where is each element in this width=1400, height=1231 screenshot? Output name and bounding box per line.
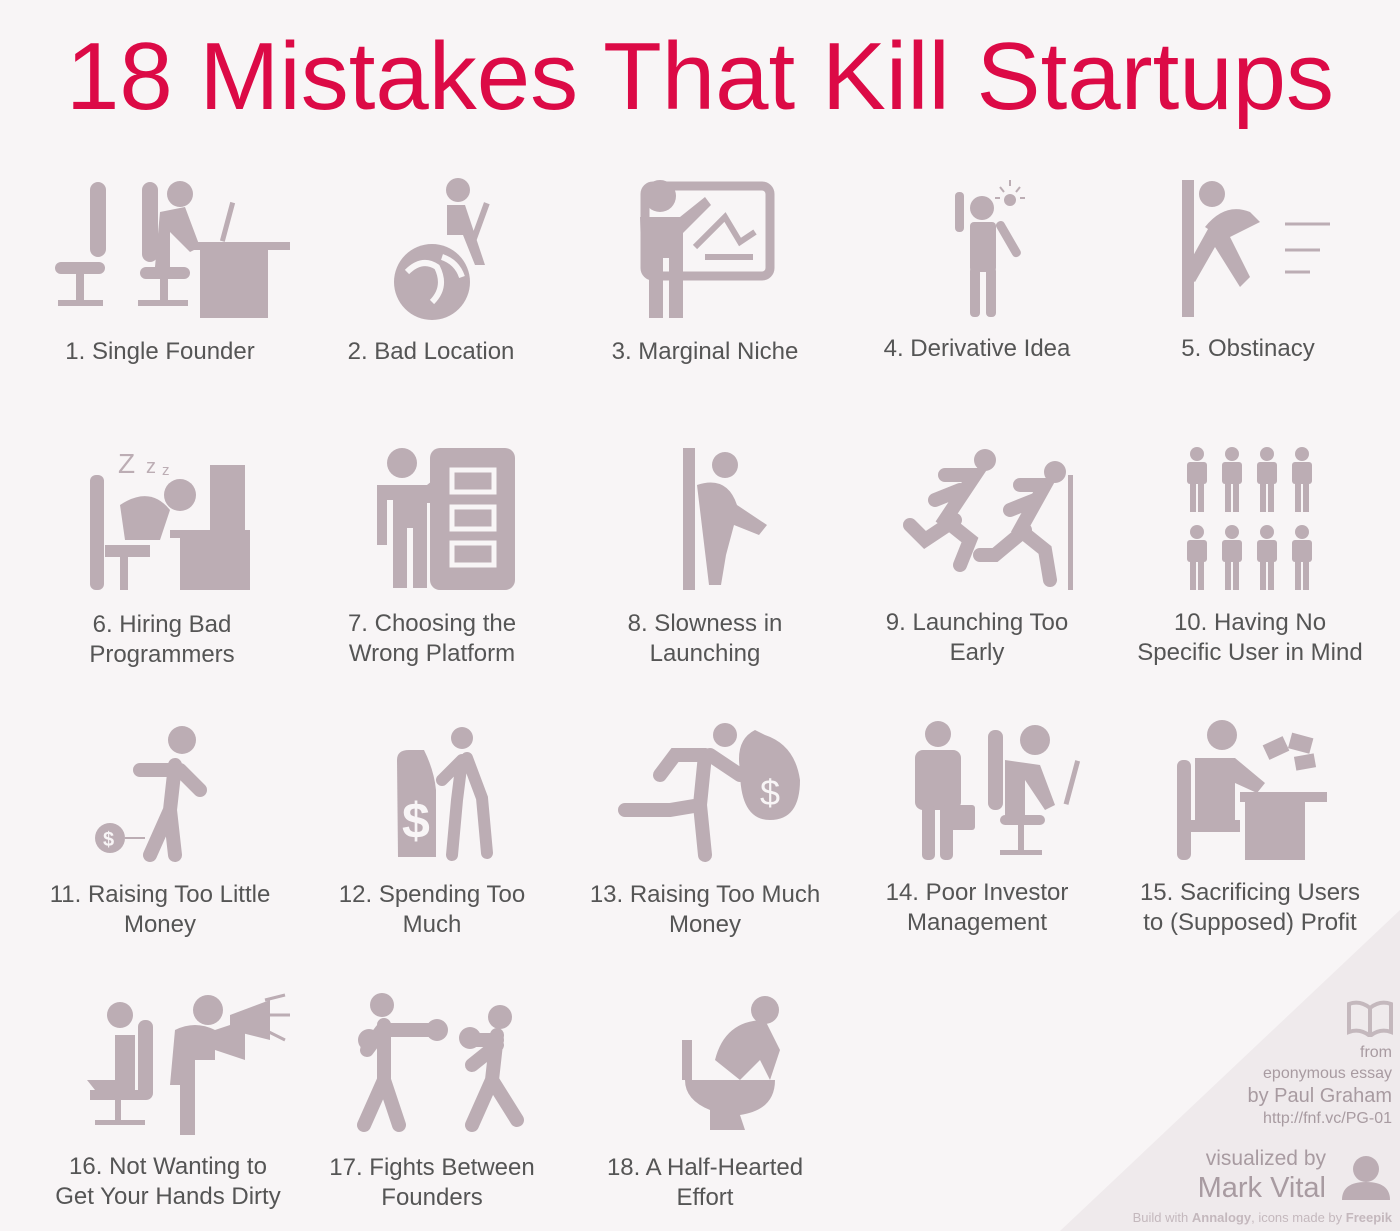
icon: hiring bad programmers: z — [162, 462, 170, 479]
icon: fights between founders — [357, 993, 524, 1132]
icon: book — [1347, 1000, 1393, 1037]
label 8 — [628, 610, 782, 667]
label 17: 17. Fights Between — [329, 1154, 535, 1181]
icon: spending too much: $ — [402, 793, 430, 849]
credit: visualized by: visualized by — [1206, 1147, 1326, 1170]
label 6: Programmers — [89, 641, 235, 668]
icon: no specific user — [1187, 447, 1312, 590]
label 7: 7. Choosing the — [348, 610, 516, 637]
source text — [1247, 1044, 1392, 1127]
icon: raising too much: $ — [760, 772, 780, 813]
label 14 — [886, 879, 1068, 936]
icon: slowness — [683, 448, 767, 590]
label 12: 12. Spending Too — [339, 881, 525, 908]
label 16: Get Your Hands Dirty — [55, 1183, 281, 1210]
label 8: 8. Slowness in — [628, 610, 782, 637]
label 17 — [329, 1154, 535, 1211]
source text: http://fnf.vc/PG-01 — [1263, 1110, 1392, 1127]
icon: not wanting hands dirty — [87, 994, 290, 1135]
label 13: Money — [669, 911, 741, 938]
icon: hiring bad programmers — [90, 448, 250, 590]
label 15: to (Supposed) Profit — [1143, 909, 1357, 936]
label 10 — [1137, 609, 1363, 666]
icon: user — [1342, 1156, 1390, 1200]
label 18 — [607, 1154, 803, 1211]
label 11: 11. Raising Too Little — [50, 881, 270, 908]
label 10: 10. Having No — [1174, 609, 1326, 636]
label 1: 1. Single Founder — [65, 338, 255, 365]
label 11: Money — [124, 911, 196, 938]
label 9: Early — [950, 639, 1004, 666]
label 11 — [50, 881, 270, 938]
icon: raising too little — [95, 726, 207, 862]
label 12 — [339, 881, 525, 938]
icon: raising too much — [618, 723, 800, 862]
label 13 — [590, 881, 820, 938]
icon: obstinacy — [1182, 180, 1330, 317]
label 8: Launching — [650, 640, 760, 667]
footer credit: Build with Annalogy, icons made by Freepik — [1133, 1210, 1392, 1225]
label 16: 16. Not Wanting to — [69, 1153, 267, 1180]
source text: from — [1360, 1044, 1392, 1061]
icon: hiring bad programmers: z — [146, 456, 156, 478]
icon: hiring bad programmers: Z — [118, 448, 135, 479]
label 9 — [886, 609, 1068, 666]
label 7 — [348, 610, 516, 667]
label 18: 18. A Half-Hearted — [607, 1154, 803, 1181]
source text: by Paul Graham — [1247, 1085, 1392, 1107]
label 5: 5. Obstinacy — [1181, 335, 1315, 362]
label 6: 6. Hiring Bad — [93, 611, 231, 638]
icon: sacrificing users — [1177, 720, 1327, 860]
label 14: Management — [907, 909, 1047, 936]
icon: raising too little: $ — [103, 829, 114, 851]
credit: visualized by — [1198, 1147, 1326, 1204]
label 10: Specific User in Mind — [1137, 639, 1363, 666]
label 14: 14. Poor Investor — [886, 879, 1068, 906]
label 15 — [1140, 879, 1360, 936]
source text: eponymous essay — [1263, 1065, 1392, 1082]
icon: derivative idea — [955, 180, 1025, 317]
icon: bad location — [394, 178, 490, 320]
icon: single founder — [55, 181, 290, 318]
label 2: 2. Bad Location — [348, 338, 514, 365]
label 18: Effort — [677, 1184, 733, 1211]
label 16 — [55, 1153, 281, 1210]
label 6 — [89, 611, 235, 668]
label 15: 15. Sacrificing Users — [1140, 879, 1360, 906]
label 13: 13. Raising Too Much — [590, 881, 820, 908]
title: 18 Mistakes That Kill Startups — [66, 23, 1334, 130]
icon: half-hearted effort — [682, 996, 780, 1130]
label 12: Much — [403, 911, 461, 938]
icon: marginal niche — [640, 180, 774, 318]
credit: visualized by: Mark Vital — [1198, 1172, 1326, 1204]
label 4: 4. Derivative Idea — [884, 335, 1070, 362]
label 3: 3. Marginal Niche — [612, 338, 798, 365]
icon: poor investor management — [915, 721, 1080, 860]
label 17: Founders — [381, 1184, 483, 1211]
label 7: Wrong Platform — [349, 640, 515, 667]
icon: wrong platform — [377, 448, 515, 590]
label 9: 9. Launching Too — [886, 609, 1068, 636]
icon: launching too early — [903, 449, 1073, 590]
icon: spending too much — [397, 727, 493, 861]
